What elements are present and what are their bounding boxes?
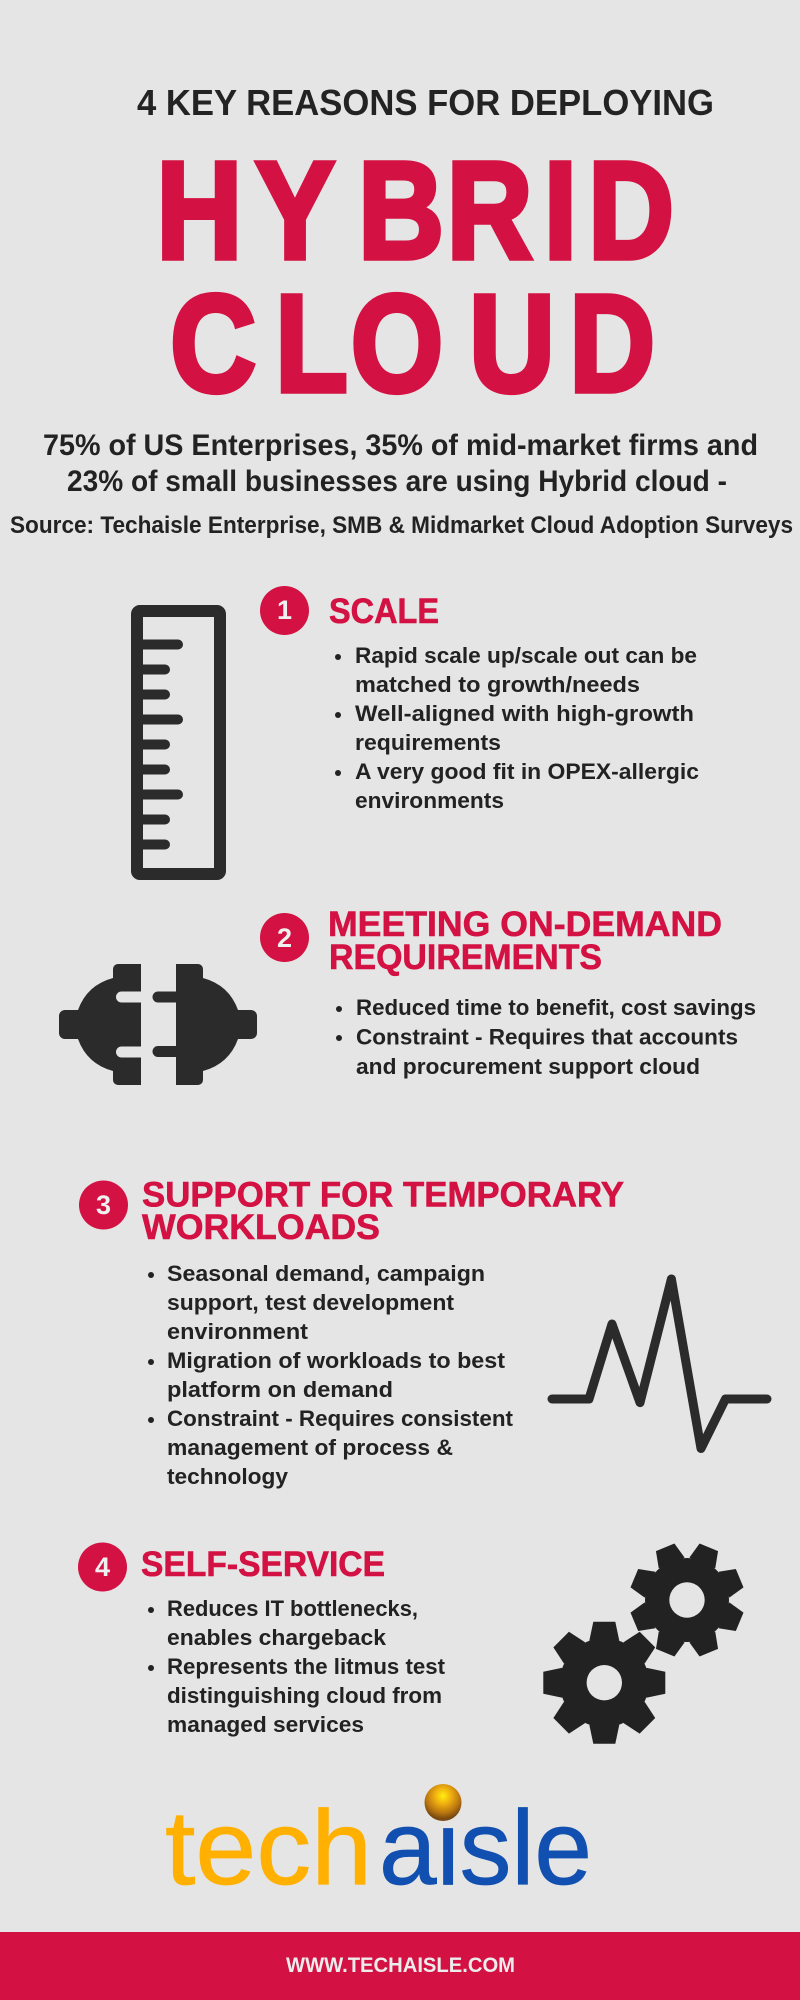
title: kicker: 4 KEY REASONS FOR DEPLOYING [137, 82, 714, 123]
bullet list: scale: requirements [355, 730, 501, 755]
footer bar: WWW.TECHAISLE.COM [286, 1954, 515, 1977]
bullet list: self-service: Represents the litmus test [167, 1654, 446, 1679]
bullet list: self-service [148, 1596, 446, 1737]
bullet list: scale: Well-aligned with high-growth [355, 701, 694, 726]
heading: self-service: SELF-SERVICE [141, 1545, 385, 1584]
bullet list: self-service: distinguishing cloud from [167, 1683, 442, 1708]
bullet list: scale: environments [355, 788, 504, 813]
panel: scale [137, 586, 699, 874]
panel: temporary workloads [79, 1176, 767, 1489]
heading: meeting on-demand requirements: MEETING ON-DEMAND [328, 905, 722, 944]
number badge 3 [79, 1180, 128, 1230]
logo: techaisle: aisle [379, 1789, 592, 1907]
bullet list: on-demand: Reduced time to benefit, cost savings [356, 995, 756, 1020]
title: hybrid cloud: CLOUD [170, 267, 655, 421]
number badge 2: 2 [277, 923, 292, 953]
number badge 4 [78, 1542, 127, 1592]
heading: scale: SCALE [329, 592, 439, 631]
statistic text: 23% of small businesses are using Hybrid cloud - [67, 465, 727, 498]
bullet list: temporary workloads: Seasonal demand, campaign [167, 1261, 485, 1286]
bullet list: temporary workloads: platform on demand [167, 1377, 393, 1402]
number badge 2 [260, 913, 309, 962]
heading: meeting on-demand requirements [328, 905, 722, 977]
heading: meeting on-demand requirements: REQUIREMENTS [329, 938, 602, 977]
icon: gears [543, 1526, 761, 1744]
title: hybrid cloud: HYBRID [157, 134, 674, 288]
bullet list: temporary workloads: environment [167, 1319, 309, 1344]
icon: pulse line [552, 1279, 767, 1448]
number badge 3: 3 [96, 1190, 111, 1220]
bullet list: scale: A very good fit in OPEX-allergic [355, 759, 699, 784]
panel: on-demand [59, 905, 756, 1085]
statistic text [43, 429, 758, 498]
statistic text: 75% of US Enterprises, 35% of mid-market firms and [43, 429, 758, 462]
logo: techaisle [165, 1784, 592, 1907]
icon: ruler [137, 611, 220, 874]
bullet list: scale: Rapid scale up/scale out can be [355, 643, 697, 668]
bullet list: temporary workloads: technology [167, 1464, 289, 1489]
number badge 1: 1 [277, 595, 292, 625]
bullet list: self-service: Reduces IT bottlenecks, [167, 1596, 418, 1621]
bullet list: self-service: enables chargeback [167, 1625, 387, 1650]
bullet list: temporary workloads [148, 1261, 514, 1489]
heading: support for temporary workloads [142, 1176, 624, 1247]
bullet list: scale [335, 643, 699, 813]
logo: techaisle: tech [165, 1789, 372, 1907]
icon: plug [59, 964, 257, 1085]
title: hybrid cloud [157, 134, 674, 421]
bullet list: temporary workloads: Migration of workloads to best [167, 1348, 506, 1373]
number badge 4: 4 [95, 1552, 110, 1582]
bullet list: on-demand: and procurement support cloud [356, 1054, 700, 1079]
bullet list: scale: matched to growth/needs [355, 672, 640, 697]
heading: support for temporary workloads: SUPPORT FOR TEMPORARY [142, 1176, 624, 1214]
bullet list: temporary workloads: Constraint - Requires consistent [167, 1406, 514, 1431]
bullet list: self-service: managed services [167, 1712, 364, 1737]
heading: support for temporary workloads: WORKLOADS [142, 1208, 380, 1247]
bullet list: temporary workloads: management of process & [167, 1435, 453, 1460]
bullet list: temporary workloads: support, test development [167, 1290, 455, 1315]
bullet list: on-demand: Constraint - Requires that accounts [356, 1024, 738, 1050]
panel: self-service [78, 1526, 761, 1744]
bullet list: on-demand [336, 995, 756, 1079]
number badge 1 [260, 586, 309, 635]
footer bar [0, 1932, 800, 2000]
